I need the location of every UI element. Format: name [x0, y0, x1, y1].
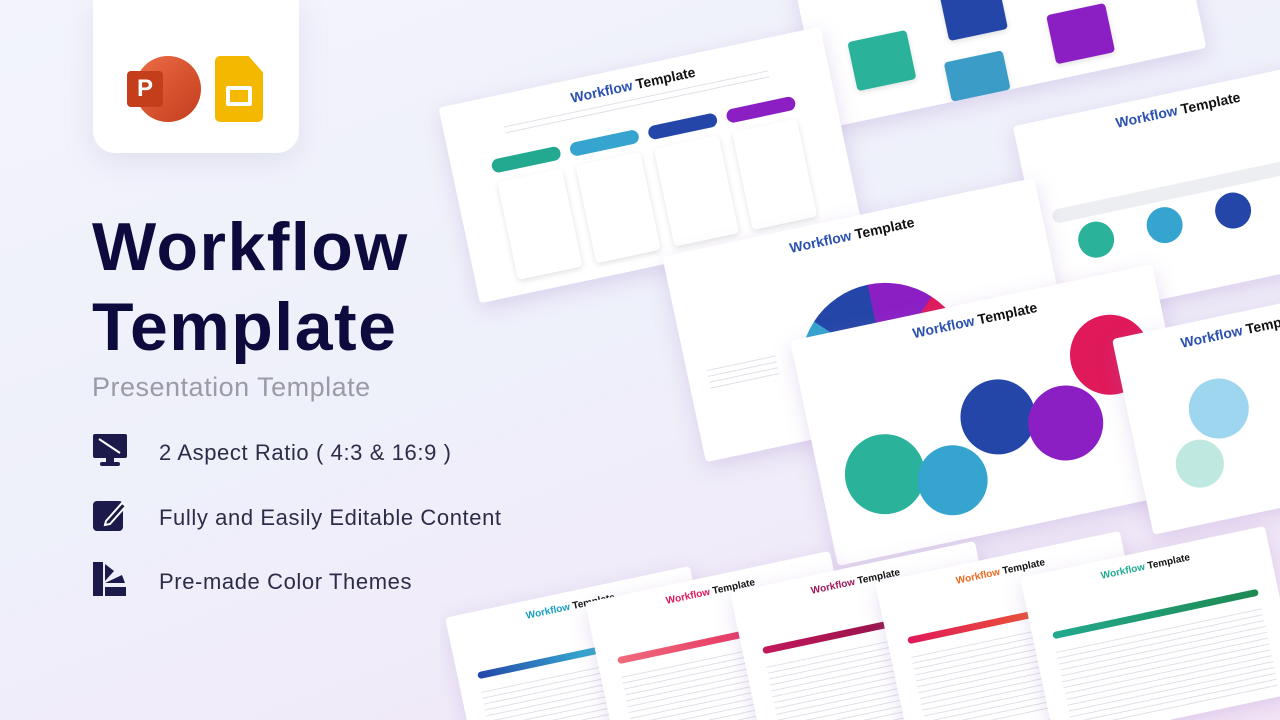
feature: editable: Fully and Easily Editable Content	[159, 505, 502, 530]
feature: aspect ratio	[93, 434, 452, 466]
feature: color themes	[93, 562, 412, 596]
slide: right partial	[1112, 285, 1280, 535]
slide: semicircle	[662, 178, 1078, 462]
title: Workflow	[92, 209, 409, 285]
slides: bottom row themes	[444, 526, 1280, 720]
title	[92, 209, 409, 365]
slides: bottom row themes: Workflow Template	[955, 557, 1046, 587]
subtitle: Presentation Template	[92, 372, 371, 402]
icon: powerpoint	[127, 56, 201, 122]
slide: circles right: Workflow Template	[1114, 89, 1242, 131]
slide: top-right chevrons	[794, 0, 1206, 129]
slides: bottom row themes: Workflow Template	[525, 592, 616, 622]
icon: powerpoint: P	[137, 75, 153, 102]
feature list	[93, 434, 502, 596]
slides: bottom row themes: Workflow Template	[810, 567, 901, 597]
feature: aspect ratio: 2 Aspect Ratio ( 4:3 & 16:9 )	[159, 440, 452, 465]
slide: bubbles front	[790, 264, 1200, 566]
slide: semicircle: Workflow Template	[788, 214, 916, 256]
feature: color themes: Pre-made Color Themes	[159, 569, 412, 594]
slide: workflow phases top	[438, 27, 862, 303]
feature: editable	[93, 501, 502, 531]
logo box	[93, 0, 299, 153]
slides: bottom row themes: Workflow Template	[665, 577, 756, 607]
slide: bubbles front: Workflow Template	[911, 299, 1039, 341]
icon: google slides	[215, 56, 263, 122]
title: Template	[92, 289, 397, 365]
slide: workflow phases top: Workflow Template	[569, 64, 697, 106]
slides: bottom row themes: Workflow Template	[1100, 552, 1191, 582]
slide: circles right	[1013, 58, 1280, 322]
